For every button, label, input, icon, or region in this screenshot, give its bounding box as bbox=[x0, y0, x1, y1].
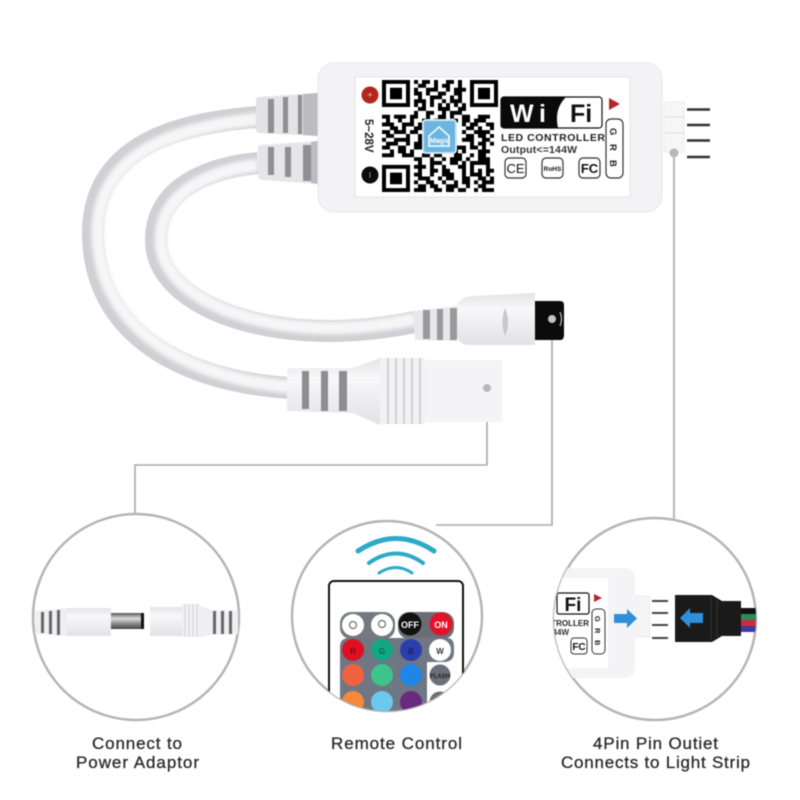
GRB box: G bbox=[607, 128, 618, 135]
off and on buttons: OFF bbox=[401, 620, 419, 630]
circle: power adaptor bbox=[33, 514, 239, 720]
wireless signal arcs bbox=[358, 538, 434, 573]
right DC socket bbox=[150, 604, 238, 637]
remote bbox=[327, 579, 465, 712]
RGBW buttons: R bbox=[350, 647, 356, 656]
LED controller text: LED CONTROLLER bbox=[501, 132, 605, 144]
red plus terminal bbox=[362, 86, 378, 104]
RoHS mark bbox=[542, 158, 563, 178]
QR app logo: Magic bbox=[430, 138, 450, 145]
callout dot: pins bbox=[670, 148, 678, 158]
mini controller: B bbox=[593, 640, 602, 646]
colour buttons row 2 bbox=[342, 664, 450, 686]
blue arrow left bbox=[680, 608, 703, 628]
GRB box: B bbox=[607, 160, 618, 167]
brightness buttons bbox=[340, 612, 395, 639]
caption: power adaptor: Power Adaptor bbox=[76, 753, 199, 772]
WiFi badge bbox=[501, 97, 602, 128]
4-pin connector bbox=[664, 102, 710, 157]
IR receiver plug bbox=[413, 293, 564, 345]
black RGB plug bbox=[675, 595, 761, 642]
caption: 4 pin outlet: Connects to Light Strip bbox=[561, 753, 750, 772]
left DC plug bbox=[35, 608, 144, 636]
mini controller: G bbox=[593, 616, 602, 622]
mini controller: FC bbox=[572, 642, 586, 653]
callout dot: power bbox=[483, 384, 491, 392]
RGBW buttons: B bbox=[408, 647, 414, 656]
FC mark: FC bbox=[581, 161, 599, 176]
mini controller bbox=[554, 568, 634, 678]
CE mark: CE bbox=[506, 161, 525, 176]
black IR tip bbox=[530, 301, 564, 340]
caption: remote control: Remote Control bbox=[331, 734, 462, 753]
controller label bbox=[355, 77, 630, 197]
controller bbox=[318, 63, 662, 212]
blue arrow right bbox=[614, 609, 637, 628]
mini controller: 44W bbox=[553, 628, 569, 637]
colour button panel bbox=[339, 637, 455, 712]
mini controller: TROLLER bbox=[551, 619, 589, 628]
caption: power adaptor bbox=[76, 734, 199, 772]
mini controller: R bbox=[593, 628, 602, 634]
RGBW buttons: W bbox=[436, 647, 444, 656]
upper cable boot bbox=[256, 93, 318, 136]
WiFi badge: Wi bbox=[510, 100, 546, 128]
RGBW buttons bbox=[342, 639, 451, 661]
colour buttons row 3 bbox=[342, 691, 452, 713]
WiFi badge: Fi bbox=[570, 100, 592, 128]
RGBW buttons: G bbox=[379, 647, 385, 656]
lower cable boot bbox=[258, 141, 318, 184]
off and on buttons bbox=[398, 612, 454, 639]
mini controller: Fi bbox=[565, 595, 581, 616]
circle: 4 pin outlet bbox=[530, 518, 761, 720]
colour buttons row 2: FLASH bbox=[430, 674, 450, 680]
caption: power adaptor: Connect to bbox=[92, 734, 182, 753]
colour buttons row 3: STROBE bbox=[429, 701, 452, 707]
circle: remote control bbox=[292, 521, 482, 738]
RoHS mark: RoHS bbox=[544, 166, 562, 173]
outer power cable bbox=[93, 117, 290, 388]
GRB box: R bbox=[607, 144, 618, 151]
callout dot: remote bbox=[548, 315, 556, 323]
DC female plug bbox=[287, 358, 502, 425]
voltage text: 5−28V bbox=[362, 119, 374, 153]
CE mark bbox=[505, 158, 526, 178]
output text: Output<=144W bbox=[501, 144, 577, 156]
caption: 4 pin outlet bbox=[561, 734, 750, 772]
FC mark bbox=[579, 158, 600, 178]
controller body bbox=[318, 63, 662, 212]
black minus terminal bbox=[362, 166, 378, 184]
colour buttons row 4 bbox=[371, 716, 422, 738]
QR code bbox=[382, 82, 496, 190]
QR app logo bbox=[423, 120, 456, 153]
inner remote cable bbox=[156, 163, 415, 331]
GRB box bbox=[606, 119, 623, 178]
callout lines bbox=[135, 153, 674, 525]
off and on buttons: ON bbox=[434, 620, 448, 630]
red plus terminal: + bbox=[367, 90, 373, 100]
red triangle bbox=[609, 98, 620, 110]
mini pins bbox=[636, 596, 668, 638]
caption: 4 pin outlet: 4Pin Pin Outiet bbox=[593, 734, 718, 753]
